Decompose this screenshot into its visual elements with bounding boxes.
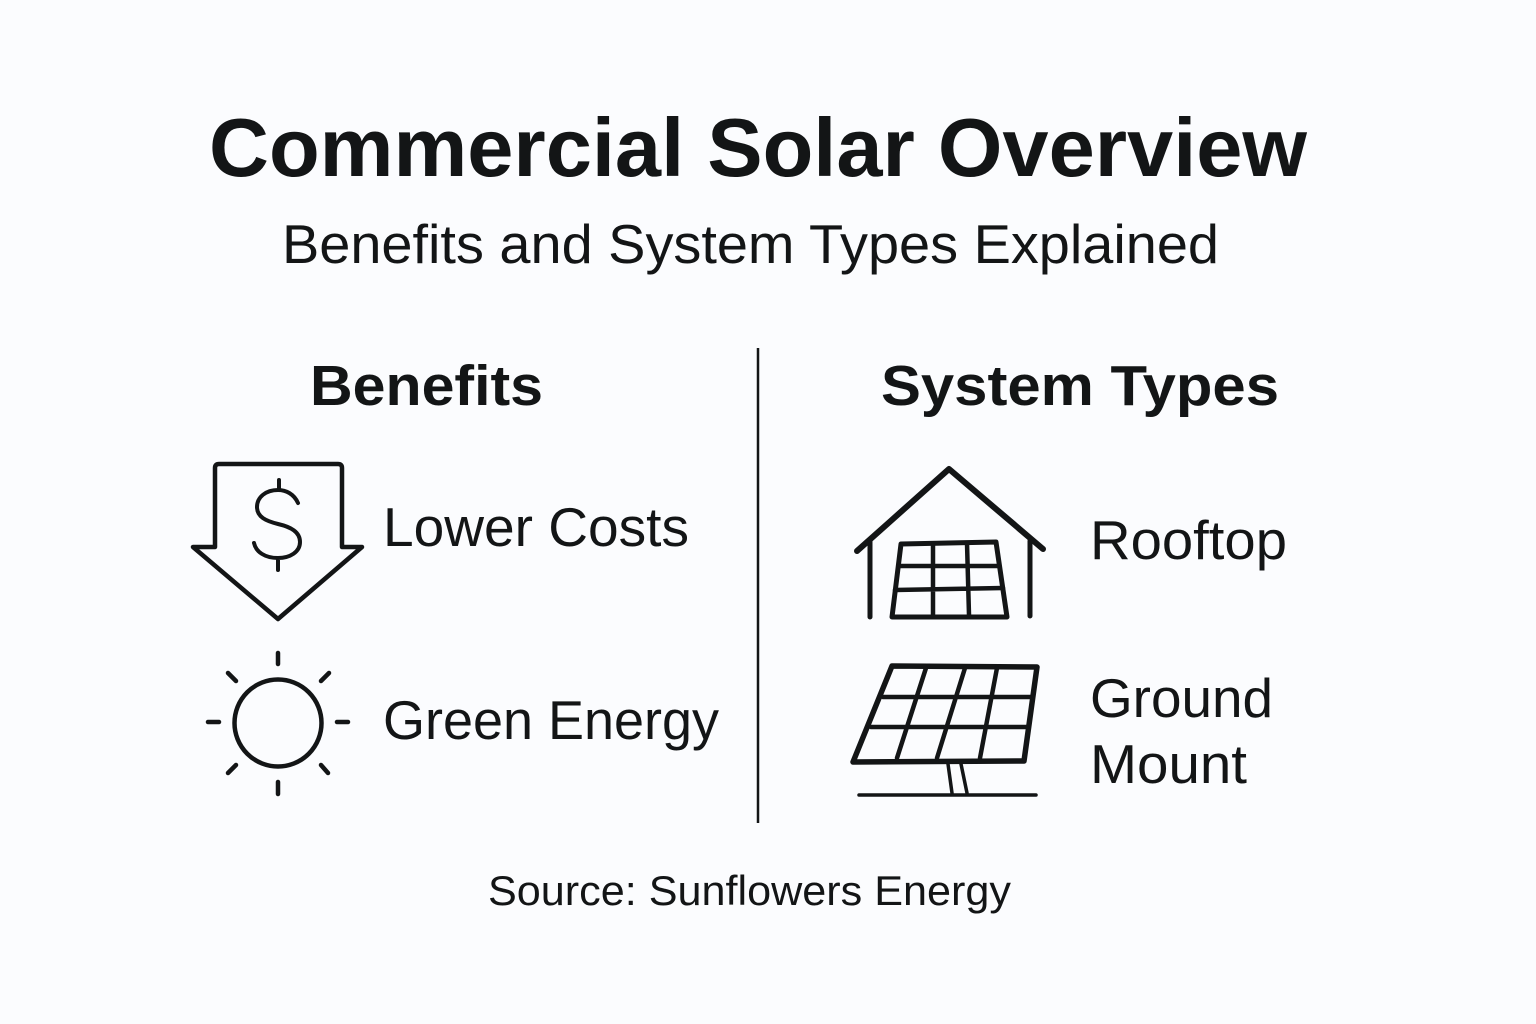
panel: benefits bbox=[193, 354, 719, 794]
icon: down arrow with dollar sign bbox=[193, 464, 362, 619]
panel: system types bbox=[853, 354, 1287, 795]
heading: system types: System Types bbox=[881, 354, 1279, 418]
label: lower costs: Lower Costs bbox=[383, 496, 689, 558]
label: rooftop: Rooftop bbox=[1090, 509, 1287, 571]
icon: house with rooftop solar bbox=[857, 469, 1043, 617]
label: ground mount: Mount bbox=[1090, 733, 1247, 795]
icon: sun bbox=[208, 653, 348, 794]
label: ground mount: Ground bbox=[1090, 667, 1273, 729]
label: ground mount bbox=[1090, 667, 1273, 795]
divider bbox=[757, 348, 759, 823]
label: green energy: Green Energy bbox=[383, 689, 719, 751]
source: Source: Sunflowers Energy bbox=[488, 867, 1011, 914]
icon: ground-mounted solar panel bbox=[853, 666, 1037, 795]
heading: benefits: Benefits bbox=[310, 354, 543, 418]
title: Commercial Solar Overview bbox=[209, 101, 1307, 194]
subtitle: Benefits and System Types Explained bbox=[282, 213, 1219, 275]
